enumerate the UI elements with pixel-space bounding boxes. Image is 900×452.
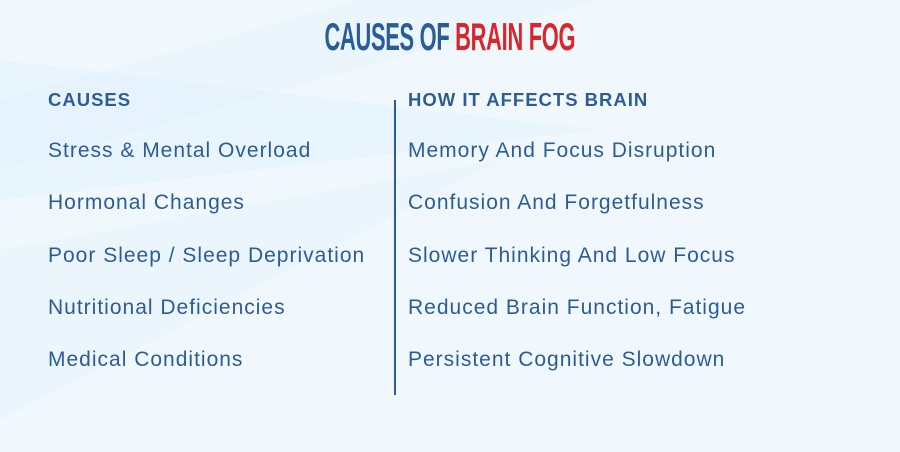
effect 3: Slower Thinking And Low Focus bbox=[408, 244, 735, 267]
heading: causes: CAUSES bbox=[48, 89, 131, 110]
cause 3: Poor Sleep / Sleep Deprivation bbox=[48, 244, 365, 267]
effect 5: Persistent Cognitive Slowdown bbox=[408, 348, 725, 371]
cause 5: Medical Conditions bbox=[48, 348, 243, 371]
cause 4: Nutritional Deficiencies bbox=[48, 296, 286, 319]
effect 2: Confusion And Forgetfulness bbox=[408, 191, 705, 214]
title: CAUSES OF BRAIN FOG bbox=[325, 16, 575, 59]
cause 2: Hormonal Changes bbox=[48, 191, 245, 214]
panel: effects bbox=[408, 89, 746, 371]
panel: causes bbox=[48, 89, 365, 371]
heading: effects: HOW IT AFFECTS BRAIN bbox=[408, 89, 648, 110]
effect 4: Reduced Brain Function, Fatigue bbox=[408, 296, 746, 319]
effect 1: Memory And Focus Disruption bbox=[408, 139, 716, 162]
cause 1: Stress & Mental Overload bbox=[48, 139, 311, 162]
divider bbox=[394, 100, 396, 395]
